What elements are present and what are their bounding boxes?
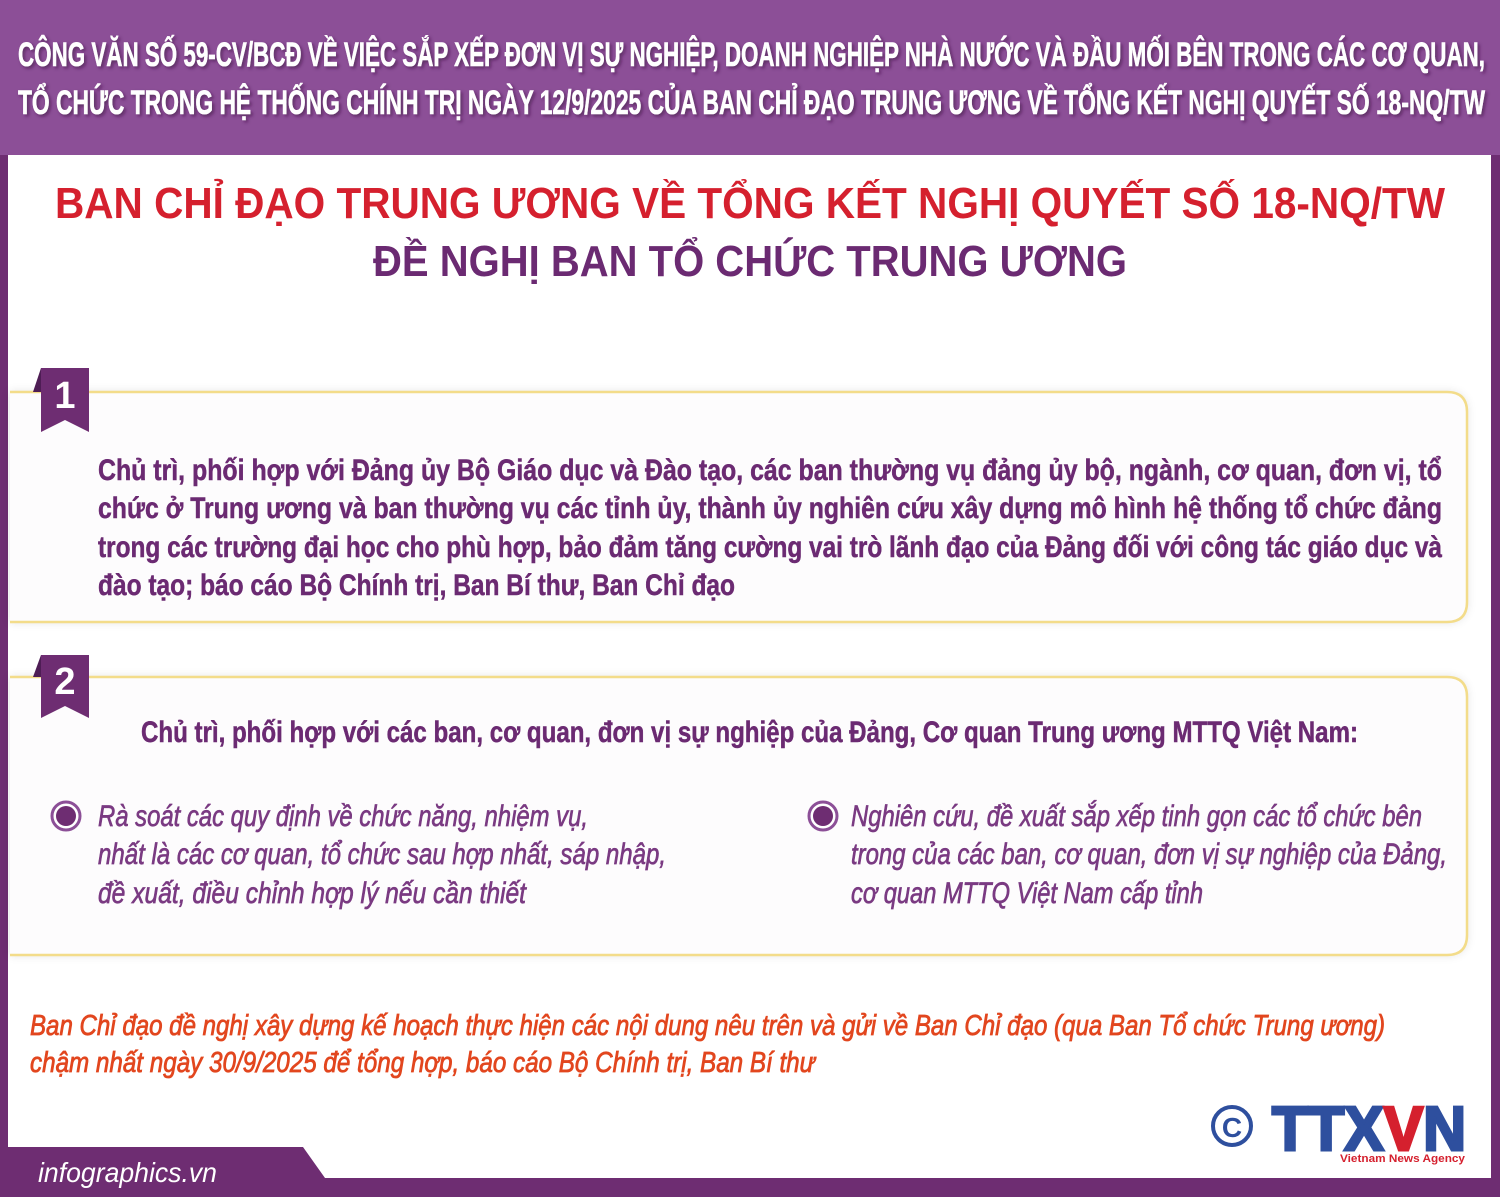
bullet left: đề xuất, điều chỉnh hợp lý nếu cần thiết: [98, 877, 527, 910]
text block 1: [98, 454, 1442, 602]
icon: ribbon 1: [33, 368, 89, 432]
footer bar: [0, 1147, 1500, 1197]
bullet right: [809, 800, 1447, 910]
footer note: chậm nhất ngày 30/9/2025 để tổng hợp, báo cáo Bộ Chính trị, Ban Bí thư: [30, 1047, 817, 1079]
logo: TTXVN: C: [1222, 1112, 1242, 1143]
title: [55, 177, 1445, 286]
bullet right: cơ quan MTTQ Việt Nam cấp tỉnh: [851, 877, 1203, 910]
bullet left: Rà soát các quy định về chức năng, nhiệm vụ,: [98, 800, 588, 833]
footer note: [30, 1010, 1385, 1079]
right border: [1491, 150, 1500, 1197]
panel: section 1: [10, 368, 1467, 622]
icon: ribbon 1: 1: [54, 375, 76, 417]
bullet left: nhất là các cơ quan, tổ chức sau hợp nhất, sáp nhập,: [98, 838, 666, 871]
icon: ribbon 2: [33, 655, 89, 718]
header text: [18, 35, 1486, 122]
logo: TTXVN: Vietnam News Agency: [1340, 1153, 1466, 1165]
logo: TTXVN: TTXVN: [1272, 1095, 1466, 1164]
left border: [0, 150, 8, 1197]
footer site text: infographics.vn: [38, 1157, 217, 1188]
icon: ribbon 2: 2: [54, 661, 76, 703]
header band: [0, 0, 1500, 155]
bullet left: [52, 800, 666, 910]
text block 1: đào tạo; báo cáo Bộ Chính trị, Ban Bí thư, Ban Chỉ đạo: [98, 569, 735, 602]
panel: section 2: [10, 655, 1467, 955]
title: ĐỀ NGHỊ BAN TỔ CHỨC TRUNG ƯƠNG: [373, 235, 1127, 286]
